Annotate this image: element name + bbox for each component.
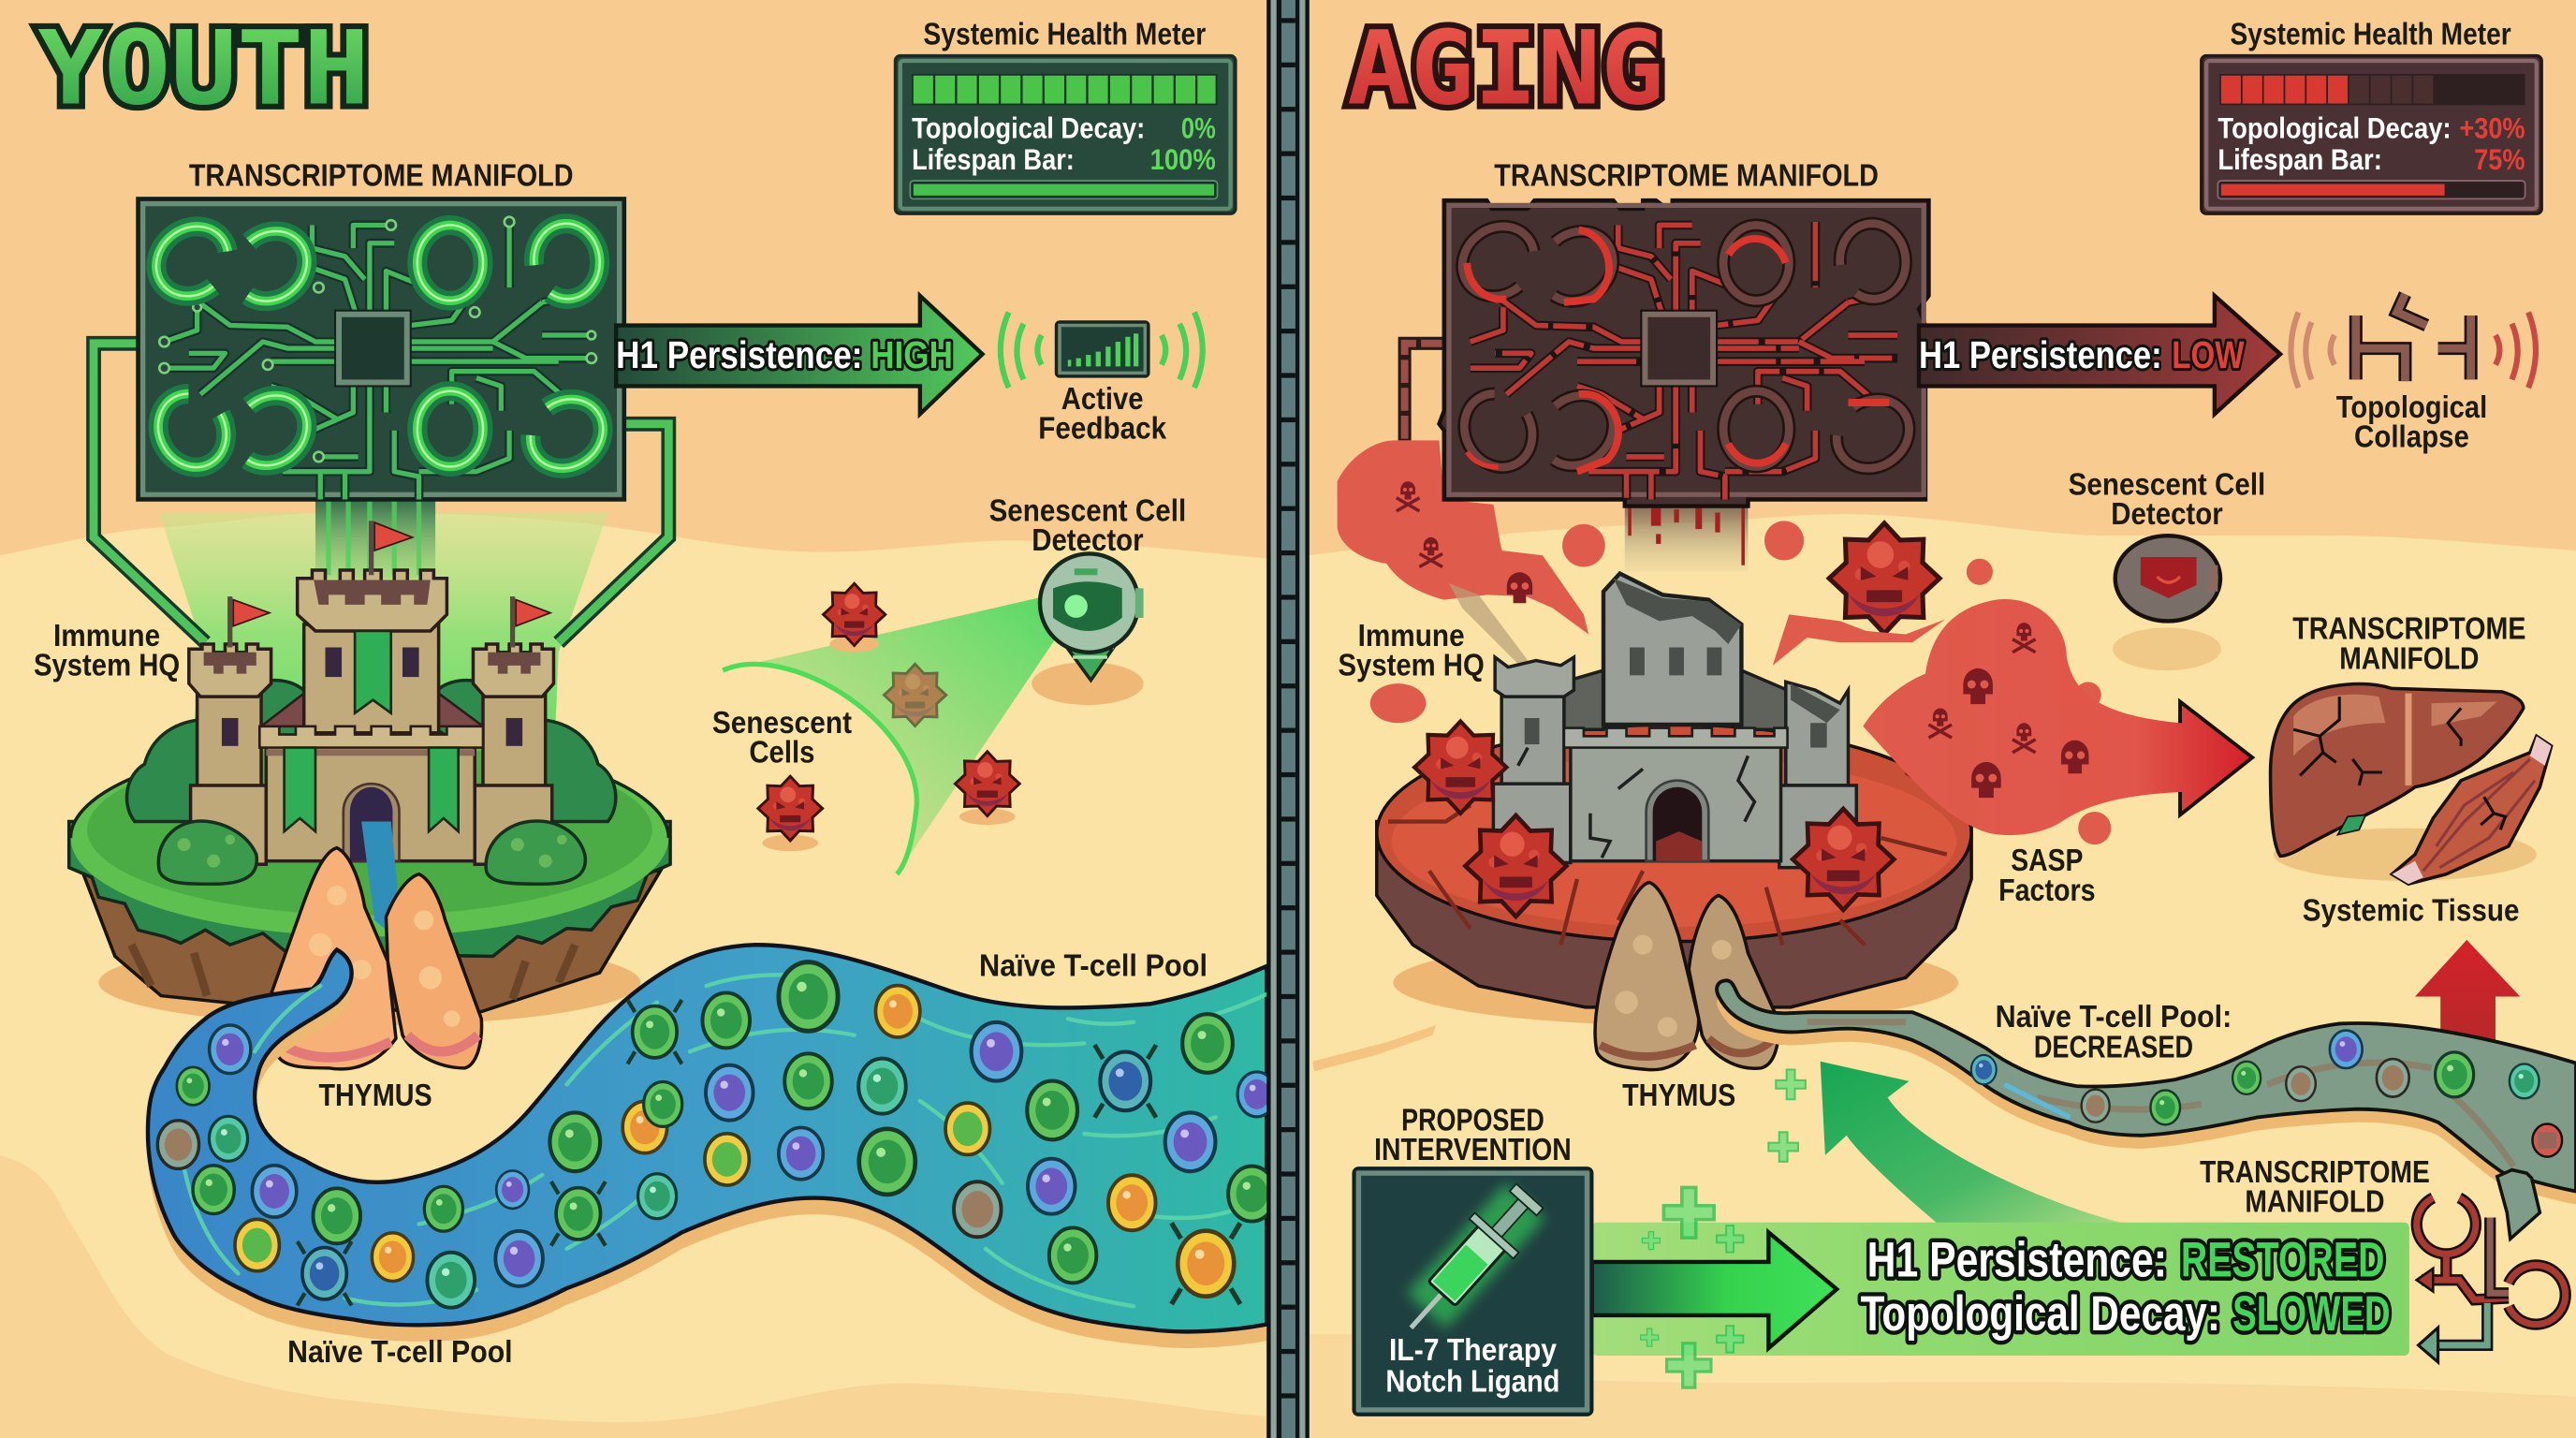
label: thymus aged: THYMUS <box>1622 1078 1735 1113</box>
background: youth panel <box>0 0 1268 1438</box>
circuit traces <box>1471 222 1897 500</box>
label: thymus youth: THYMUS <box>318 1078 432 1113</box>
lifespan readout <box>912 142 1216 176</box>
label: senescent cells: Cells <box>749 735 815 770</box>
stream from gate <box>361 822 398 930</box>
label: topological collapse <box>2336 390 2487 454</box>
castle ruined <box>1493 574 1856 868</box>
label: senescent cell detector aging: Detector <box>2111 497 2223 532</box>
t-cells <box>157 962 1276 1308</box>
label: topological collapse: Collapse <box>2354 419 2469 454</box>
lifespan bar <box>910 181 1218 198</box>
liver <box>2271 684 2524 856</box>
therapy text <box>1385 1333 1559 1400</box>
toxin skulls <box>1928 623 2088 798</box>
detector probe aging <box>2113 536 2221 670</box>
label: transcriptome manifold tissue <box>2292 612 2525 676</box>
label: transcriptome manifold youth: TRANSCRIPTOME MANIFOLD <box>189 158 574 193</box>
right tower <box>1779 682 1856 868</box>
central chip <box>335 311 411 386</box>
decay readout: +30% <box>2459 110 2525 144</box>
rear walls <box>1564 670 1788 729</box>
label: naive pool decreased: Naïve T-cell Pool: <box>1996 1000 2232 1034</box>
wall banners <box>285 748 459 831</box>
manifold stem youth <box>315 496 435 579</box>
toxin skulls <box>1397 481 1532 603</box>
meter segments <box>2219 74 2525 105</box>
health meter: youth <box>896 17 1236 213</box>
title: AGING: AGING <box>1347 9 1664 128</box>
lifespan bar <box>2217 181 2525 198</box>
muscle <box>2392 736 2552 884</box>
left tower <box>1493 657 1573 862</box>
arrow: H1 persistence low <box>1919 296 2280 414</box>
lifespan readout: 75% <box>2474 142 2525 176</box>
shrunken river shadow <box>1717 993 2576 1204</box>
lifespan readout: 100% <box>1150 142 1216 176</box>
meter panel <box>896 56 1236 213</box>
cloud: SASP left plume <box>1338 440 1588 634</box>
label: transcriptome manifold tissue: MANIFOLD <box>2339 641 2479 676</box>
broken pipe left aging <box>1405 344 1444 440</box>
bushes youth <box>126 681 616 822</box>
label: systemic tissue: Systemic Tissue <box>2303 894 2519 929</box>
arrow up to tissue <box>2415 940 2520 1068</box>
icon: broken topology bottom right <box>2417 1197 2566 1362</box>
icon: syringe <box>1389 1176 1552 1347</box>
label: immune system HQ youth: Immune <box>53 619 160 653</box>
senescent cells youth <box>758 583 1019 851</box>
central chip <box>1641 311 1717 386</box>
gate door <box>1653 787 1702 861</box>
cloud: SASP below virus <box>1773 614 1945 666</box>
gate rubble <box>1656 831 1702 861</box>
label: senescent cell detector youth <box>989 493 1186 558</box>
label: naive pool decreased: DECREASED <box>2034 1030 2193 1064</box>
therapy text: IL-7 Therapy <box>1389 1333 1557 1368</box>
label: naive t-cell pool lower: Naïve T-cell Pool <box>287 1335 513 1370</box>
label: transcriptome manifold lower: MANIFOLD <box>2245 1184 2385 1219</box>
pads <box>159 217 596 462</box>
intervention arrow <box>1592 1232 1837 1348</box>
label: immune system HQ youth: System HQ <box>34 648 180 682</box>
meter heading: Systemic Health Meter <box>923 17 1206 51</box>
intervention card <box>1354 1168 1592 1415</box>
side tower right <box>473 644 553 864</box>
result band <box>1592 1223 2409 1356</box>
label: proposed intervention <box>1374 1104 1572 1167</box>
lifespan readout <box>2217 142 2525 176</box>
gate <box>1647 781 1708 861</box>
lifespan readout: Lifespan Bar: <box>912 142 1075 176</box>
label: senescent cell detector aging <box>2069 467 2265 532</box>
feedback pipe right <box>559 424 668 642</box>
label: senescent cell detector aging: Senescent Cell <box>2069 467 2265 502</box>
glow beams to castle <box>159 513 607 731</box>
title: YOUTH: YOUTH <box>37 9 370 128</box>
label: proposed intervention: INTERVENTION <box>1374 1133 1572 1167</box>
label: transcriptome manifold tissue: TRANSCRIPTOME <box>2292 612 2525 647</box>
decay slowed: Topological Decay: <box>1861 1286 2220 1342</box>
flags <box>230 521 550 648</box>
H1 restored: RESTORED <box>2181 1233 2385 1288</box>
meter segments <box>912 74 1218 105</box>
naive t-cell river aging <box>1717 980 2576 1239</box>
H1 label: HIGH <box>871 333 953 376</box>
label: immune system HQ aging: Immune <box>1358 619 1465 653</box>
SASP arrow and cloud <box>1863 599 2252 835</box>
label: active feedback <box>1038 382 1167 447</box>
decay readout: 0% <box>1181 110 1216 144</box>
side tower left <box>189 644 271 864</box>
persistent loops <box>142 213 617 482</box>
damage trail <box>1449 583 1528 666</box>
label: active feedback: Feedback <box>1038 412 1167 447</box>
river sediment <box>1808 1022 2513 1167</box>
curtain wall <box>259 726 483 861</box>
floating island youth <box>69 740 670 1025</box>
manifold panel aging <box>1439 200 1928 506</box>
centre tower <box>1603 574 1741 725</box>
feedback pipe left <box>94 344 205 642</box>
remaining t-cells <box>1971 1031 2562 1157</box>
H1 label: LOW <box>2172 333 2245 376</box>
island dirt <box>82 871 661 1012</box>
castle youth <box>158 521 585 884</box>
river branch <box>2497 1170 2539 1239</box>
front bushes <box>158 821 585 884</box>
feedback pipe right highlight <box>559 424 668 642</box>
H1 restored: H1 Persistence: <box>1867 1233 2167 1288</box>
roofs <box>261 694 483 726</box>
senescent cells aging <box>1414 523 1939 917</box>
thymus youth <box>271 848 482 1069</box>
river currents <box>181 975 1266 1306</box>
cracked earth <box>1377 822 1971 1007</box>
label: transcriptome manifold aging: TRANSCRIPTOME MANIFOLD <box>1494 158 1879 193</box>
curtain wall <box>1518 728 1788 861</box>
label: SASP factors: SASP <box>2011 844 2083 878</box>
cloud droplets <box>1370 521 2111 844</box>
centre tower <box>298 570 446 733</box>
island grass fringe <box>69 822 670 956</box>
broken pipe left colour <box>1405 344 1444 440</box>
label: transcriptome manifold lower <box>2200 1155 2430 1219</box>
label: immune system HQ youth <box>34 619 180 682</box>
H1 label: H1 Persistence: <box>1919 333 2162 376</box>
background: aging panel <box>1308 0 2576 1438</box>
collapsing loops <box>1448 213 1923 482</box>
cracked top <box>1377 725 1971 942</box>
centre divider <box>1266 0 1310 1438</box>
label: topological collapse: Topological <box>2336 390 2487 425</box>
river shadow <box>148 961 1266 1348</box>
icon: active feedback monitor <box>1001 312 1203 388</box>
result text <box>1861 1233 2391 1342</box>
label: immune system HQ aging: System HQ <box>1339 648 1485 682</box>
label: SASP factors <box>1998 844 2096 908</box>
label: naive pool decreased <box>1996 1000 2232 1064</box>
circuit traces <box>165 222 592 500</box>
label: transcriptome manifold lower: TRANSCRIPTOME <box>2200 1155 2430 1190</box>
feedback pipe left highlight <box>94 344 205 642</box>
label: senescent cell detector youth: Detector <box>1032 523 1144 558</box>
decay readout: Topological Decay: <box>912 110 1145 144</box>
label: naive t-cell pool upper: Naïve T-cell Pool <box>979 949 1208 984</box>
gate <box>344 784 399 861</box>
label: senescent cell detector youth: Senescent Cell <box>989 493 1186 528</box>
detector probe youth <box>1032 553 1144 705</box>
label: proposed intervention: PROPOSED <box>1401 1104 1544 1138</box>
thymus aged <box>1595 882 1778 1070</box>
detector beam <box>723 594 1060 874</box>
decay slowed: SLOWED <box>2232 1286 2391 1342</box>
sparkles <box>1641 1070 1806 1387</box>
health meter: aging <box>2202 17 2541 213</box>
label: senescent cells <box>712 706 852 770</box>
meter panel <box>2202 56 2541 213</box>
lifespan readout: Lifespan Bar: <box>2217 142 2382 176</box>
curved restoration arrow <box>1821 1062 2134 1225</box>
H1 label: H1 Persistence: <box>616 333 862 376</box>
arrow: H1 persistence high <box>616 296 983 414</box>
label: immune system HQ aging <box>1339 619 1485 682</box>
gate door <box>350 787 392 861</box>
label: senescent cells: Senescent <box>712 706 852 741</box>
tissue: liver and muscle <box>2271 684 2552 884</box>
island grass top <box>70 740 668 936</box>
label: active feedback: Active <box>1061 382 1144 417</box>
decay readout: Topological Decay: <box>2217 110 2452 144</box>
therapy text: Notch Ligand <box>1385 1365 1559 1400</box>
corroded stem aging <box>1625 498 1748 572</box>
naive t-cell river youth <box>148 945 1276 1331</box>
meter heading: Systemic Health Meter <box>2231 17 2511 51</box>
label: SASP factors: Factors <box>1998 873 2096 908</box>
manifold panel youth <box>138 198 624 500</box>
icon: topological collapse <box>2291 294 2536 388</box>
platform aging <box>1377 725 1971 1025</box>
